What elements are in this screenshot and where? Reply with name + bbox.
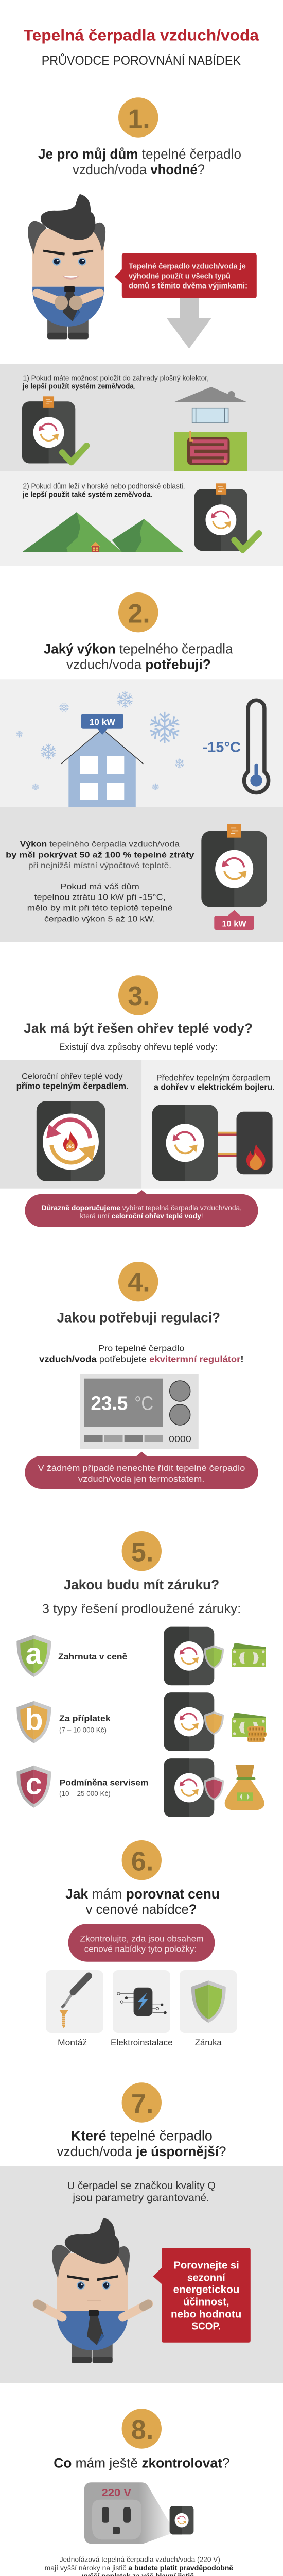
red callout (153, 2248, 251, 2343)
money and coins (232, 1713, 267, 1742)
section 6: price (46, 1840, 237, 2047)
shield c (16, 1766, 51, 1808)
label b: Za příplatek (59, 1714, 111, 1723)
explanation text: mělo by mít při této teplotě tepelné (27, 904, 173, 912)
card: installation (46, 1970, 103, 2033)
heading 7: Které tepelné čerpadlo (71, 2128, 213, 2143)
label b: (7 – 10 000 Kč) (59, 1726, 107, 1734)
text (154, 1074, 275, 1092)
explanation text: při nejnižší místní výpočtové teplotě. (28, 861, 171, 870)
card labels: Záruka (195, 2038, 222, 2047)
panel: power explanation (0, 807, 283, 942)
heading 7 (57, 2128, 226, 2159)
heading 1: Je pro můj dům tepelné čerpadlo (38, 146, 241, 162)
heading 6: v cenové nabídce? (86, 1902, 197, 1917)
pipes lower (218, 1134, 237, 1156)
text: Celoroční ohřev teplé vody (22, 1071, 123, 1081)
heading 3: Jak má být řešen ohřev teplé vody? (24, 1021, 253, 1036)
label c (59, 1778, 148, 1798)
heat pump (201, 824, 267, 907)
small heat pump (170, 2506, 193, 2534)
red callout: domů s těmito dvěma výjimkami: (129, 281, 247, 290)
10 kW house label: 10 kW (90, 717, 115, 727)
panel: preheating and boiler (142, 1060, 283, 1189)
row c (16, 1758, 264, 1817)
10 kW pump label: 10 kW (222, 919, 246, 928)
badge 7: 7. (131, 2089, 153, 2119)
heading 7: vzduch/voda je úspornější? (57, 2144, 226, 2159)
section 7: efficiency (0, 2082, 283, 2383)
temperature: -15°C (203, 739, 241, 755)
shield b: b (25, 1703, 43, 1737)
badge 8 (122, 2409, 162, 2449)
pump b (164, 1692, 224, 1751)
badge 7 (122, 2082, 162, 2123)
heading 1 (38, 146, 241, 177)
money (232, 1643, 266, 1667)
text 4: Pro tepelné čerpadlo (98, 1343, 184, 1353)
badge 6 (122, 1840, 162, 1880)
callout: recommendation (25, 1190, 258, 1227)
explanation text (6, 840, 194, 923)
heading 4: Jakou potřebuji regulaci? (57, 1310, 220, 1326)
socket: 220 V (102, 2487, 132, 2499)
label c: (10 – 25 000 Kč) (59, 1789, 111, 1798)
heading 2 (44, 641, 233, 672)
section 8: breaker (45, 2409, 233, 2576)
row b (16, 1692, 267, 1751)
text 4 (39, 1343, 244, 1364)
explanation text: Výkon tepelného čerpadla vzduch/voda (20, 840, 180, 849)
callout: recommendation: která umí celoroční ohřev teplé vody! (80, 1212, 203, 1220)
10 kW house label (81, 714, 123, 735)
text (67, 2180, 216, 2204)
text (16, 1071, 129, 1091)
shield a (16, 1635, 51, 1677)
callout: thermostat warning (25, 1452, 258, 1489)
shield c: c (26, 1768, 42, 1801)
socket (84, 2482, 171, 2544)
badge 1: 1. (128, 104, 150, 134)
badge 3: 3. (128, 981, 150, 1011)
pump (152, 1105, 218, 1181)
text: přímo tepelným čerpadlem. (16, 1081, 129, 1091)
explanation text: Pokud má váš dům (61, 882, 139, 891)
regulator: °C (134, 1393, 153, 1415)
heading 1: vzduch/voda vhodné? (73, 162, 205, 177)
label a: Zahrnuta v ceně (58, 1652, 127, 1662)
text: jsou parametry garantované. (72, 2193, 209, 2204)
red callout: Tepelné čerpadlo vzduch/voda je (129, 262, 246, 271)
upper part: sections 1 to 4 (0, 27, 283, 1489)
red callout: účinnost, (183, 2296, 229, 2308)
heading 8: Co mám ještě zkontrolovat? (54, 2455, 229, 2470)
arrow down (166, 298, 211, 349)
section 5: warranty (16, 1531, 267, 1817)
red callout: nebo hodnotu (171, 2309, 241, 2320)
pipes (218, 1133, 237, 1154)
panel: winter house (0, 679, 283, 807)
exception 1 text: je lepší použít systém země/voda. (22, 382, 136, 391)
thermometer (244, 700, 269, 792)
red callout: SCOP. (191, 2321, 221, 2332)
subtitle: PRŮVODCE POROVNÁNÍ NABÍDEK (42, 53, 241, 68)
explanation text: čerpadlo výkon 5 až 10 kW. (44, 914, 155, 923)
text: U čerpadel se značkou kvality Q (67, 2180, 216, 2192)
card labels: Elektroinstalace (111, 2038, 173, 2047)
text: Předehřev tepelným čerpadlem (156, 1074, 270, 1083)
man with raised arms (37, 2218, 149, 2363)
panel: exception 1 (0, 364, 283, 471)
exception 1 text (22, 374, 209, 391)
pump a (164, 1627, 224, 1685)
badge 3 (118, 975, 158, 1015)
exception 1 text: 1) Pokud máte možnost položit do zahrady plošný kolektor, (23, 374, 209, 382)
snowflakes (16, 691, 185, 790)
text 8: mají vyšší nároky na jistič a budete platit pravděpodobně (45, 2564, 233, 2572)
exception 2 text: 2) Pokud dům leží v horské nebo podhorské oblasti, (23, 482, 185, 490)
row a (16, 1627, 266, 1685)
regulator (80, 1374, 199, 1449)
panel: exception 2 (0, 471, 283, 566)
money bag (225, 1765, 264, 1810)
exception 2 text: je lepší použít také systém země/voda. (22, 490, 152, 499)
heading 6: Jak mám porovnat cenu (65, 1886, 220, 1902)
red callout (115, 253, 257, 298)
subheading 3: Existují dva způsoby ohřevu teplé vody: (59, 1042, 218, 1052)
card labels: Montáž (58, 2038, 87, 2047)
pump with flame (37, 1101, 105, 1181)
section 3: hot water (0, 975, 283, 1227)
pump c (164, 1758, 224, 1817)
label c: Podmíněna servisem (60, 1778, 148, 1788)
shield b (16, 1701, 51, 1743)
badge 5: 5. (131, 1538, 153, 1568)
text 8: Jednofázová tepelná čerpadla vzduch/voda (220 V) (60, 2555, 220, 2564)
lower part: sections 5 to 9 and footer (0, 1531, 283, 2576)
badge 6: 6. (131, 1847, 153, 1877)
red callout: sezonní (187, 2272, 226, 2283)
section 4: regulation (25, 1262, 258, 1489)
panel: seasonal efficiency (0, 2166, 283, 2383)
card labels (58, 2038, 222, 2047)
callout: thermostat warning: V žádném případě nenechte řídit tepelné čerpadlo (38, 1464, 245, 1473)
badge 4: 4. (128, 1268, 150, 1298)
pump with flame: 365 (66, 1144, 74, 1149)
red callout: Porovnejte si (173, 2260, 239, 2271)
10 kW pump label (214, 910, 254, 930)
section 1: suitability (28, 97, 257, 349)
pill: check items (68, 1924, 215, 1962)
explanation text: tepelnou ztrátu 10 kW při -15°C, (34, 893, 166, 902)
shield a: a (26, 1637, 43, 1670)
heading 2: vzduch/voda potřebuji? (66, 656, 211, 672)
regulator: 23.5 (91, 1393, 128, 1415)
title: Tepelná čerpadla vzduch/voda (24, 27, 259, 44)
red callout: energetickou (173, 2284, 239, 2296)
section 2: power (0, 592, 283, 942)
heading 2: Jaký výkon tepelného čerpadla (44, 641, 233, 656)
heat pump with check (22, 396, 86, 463)
card: electrical (113, 1970, 170, 2033)
subheading 5: 3 typy řešení prodloužené záruky: (42, 1602, 241, 1616)
badge 8: 8. (131, 2415, 153, 2445)
badge 5 (122, 1531, 162, 1571)
badge 4 (118, 1262, 158, 1301)
heading 5: Jakou budu mít záruku? (64, 1577, 219, 1592)
card: warranty (180, 1970, 237, 2033)
mountains (23, 512, 184, 552)
text: a dohřev v elektrickém bojleru. (154, 1083, 275, 1092)
badge 2: 2. (128, 599, 150, 629)
regulator: 0000 (169, 1434, 191, 1444)
callout: thermostat warning: vzduch/voda jen termostatem. (78, 1475, 204, 1484)
red callout: výhodné použít u všech typů (129, 272, 231, 281)
man with folded hands (28, 194, 105, 339)
pill: check items: Zkontrolujte, zda jsou obsahem (80, 1934, 204, 1943)
explanation text: by měl pokrývat 50 až 100 % tepelné ztráty (6, 851, 194, 859)
badge 1 (118, 97, 158, 138)
pill: check items: cenové nabídky tyto položky: (84, 1944, 197, 1954)
house with ground collector (174, 387, 247, 471)
exception 2 text (22, 482, 185, 499)
badge 2 (118, 592, 158, 632)
boiler (237, 1112, 273, 1174)
callout: recommendation: Důrazně doporučujeme vybírat tepelná čerpadla vzduch/voda, (42, 1204, 242, 1212)
heat pump with check (194, 483, 259, 551)
house (61, 729, 144, 807)
label b (59, 1714, 111, 1734)
heading 6 (65, 1886, 220, 1917)
panel: year-round heating (0, 1060, 142, 1189)
text 8 (45, 2555, 233, 2576)
text 4: vzduch/voda potřebujete ekvitermní regulátor ! (39, 1354, 244, 1364)
